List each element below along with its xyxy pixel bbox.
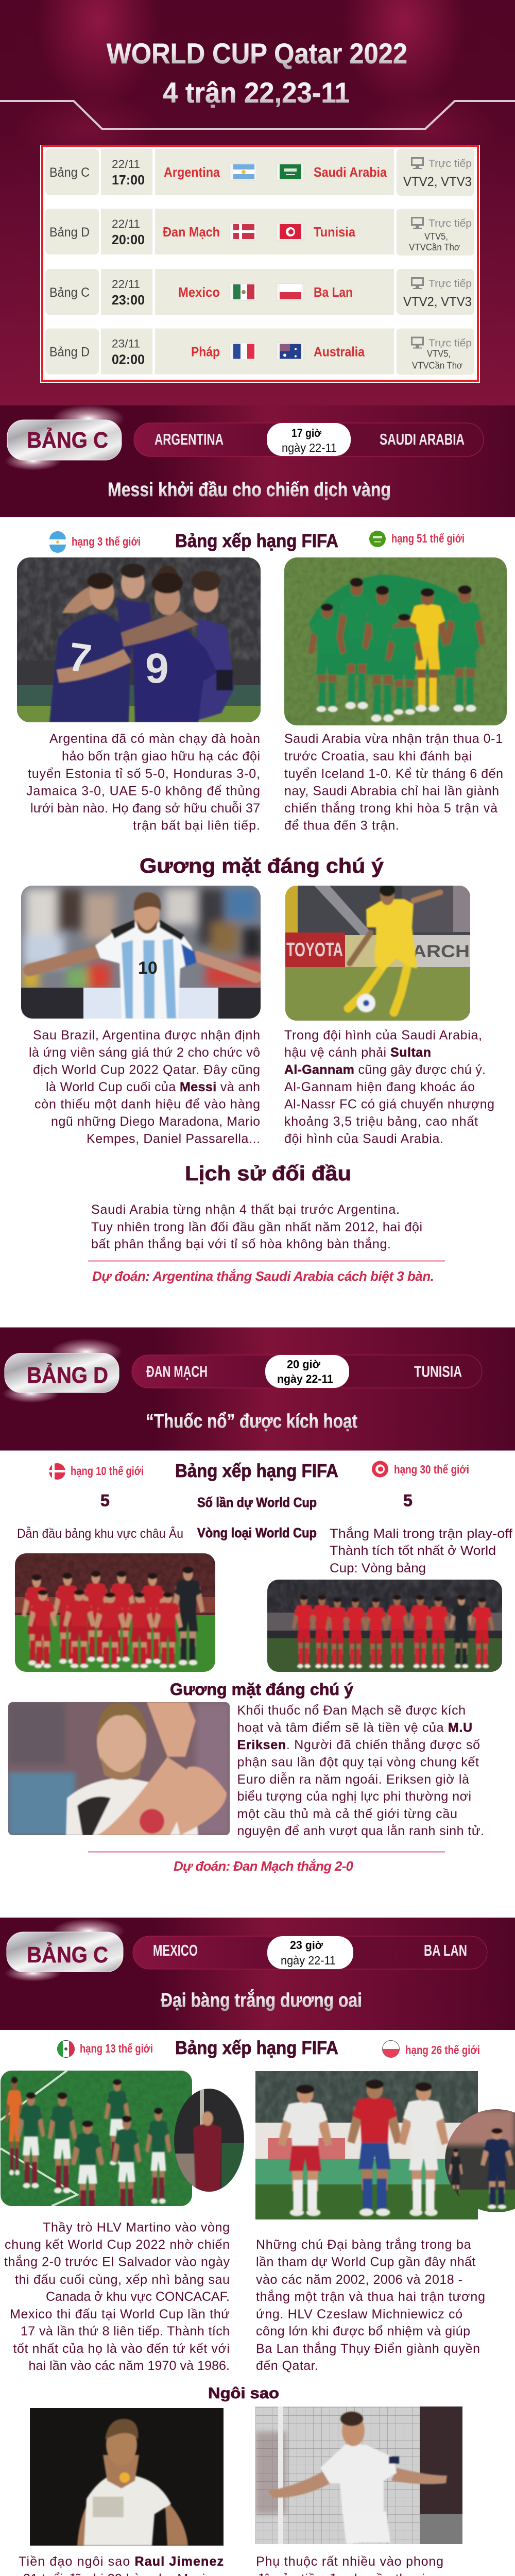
row: Argentina vs Saudi Arabia: Bảng C: [49, 165, 90, 180]
row: Đan Mạch vs Tunisia: VTVCần Thơ: [409, 242, 460, 252]
text: Raul Jimenez: Tiền đạo ngôi sao Raul Jimenez: [19, 2554, 224, 2569]
FIFA ranking row: hạng 3 thế giới: [72, 535, 141, 548]
FIFA ranking row: hạng 51 thế giới: [391, 532, 465, 545]
heading: Lịch sử đối đầu: Lịch sử đối đầu: [185, 1162, 351, 1185]
photo: Mexico team: [1, 2071, 192, 2216]
match banner: Bảng D: ĐAN MẠCH: [146, 1362, 208, 1381]
match banner: Bảng D: “Thuốc nổ” được kích hoạt: [146, 1411, 357, 1432]
text: Messi: còn thiếu một danh hiệu để vào hàng: [35, 1097, 260, 1112]
title: 4 trận 22,23-11: [163, 76, 350, 109]
prediction: Argentina: Dự đoán: Argentina thắng Saudi Arabia cách biệt 3 bàn.: [92, 1268, 434, 1284]
text: Ba Lan: vào các năm 2002, 2006 và 2018 -: [256, 2273, 462, 2287]
photo: Al-Gannam: ARCH: [412, 942, 470, 961]
FIFA ranking and World Cup stats: 5: [100, 1491, 110, 1510]
photo: Messi: [21, 886, 263, 1019]
text: Eriksen: một cầu thủ mà cả thế giới từng cầu: [237, 1807, 457, 1821]
match banner: Bảng D: TUNISIA: [414, 1362, 462, 1381]
row: Mexico vs Ba Lan: Mexico: [178, 284, 220, 300]
text: Ba Lan: công lớn khi được bổ nhiệm và giúp: [256, 2324, 470, 2338]
text: Mexico: chung kết World Cup 2022 nhờ chiến: [5, 2238, 230, 2252]
photo: Poland coach: [445, 2109, 515, 2212]
text: Mexico: Canada ở khu vực CONCACAF.: [46, 2290, 230, 2304]
text: Eriksen: hoạt và tâm điểm sẽ là tiền vệ của M.U: [237, 1721, 472, 1735]
photo: Poland team: [255, 2071, 478, 2219]
row: Đan Mạch vs Tunisia: VTV5,: [424, 231, 448, 242]
row: Pháp vs Australia: Trực tiếp: [428, 338, 472, 349]
row: Đan Mạch vs Tunisia: [45, 209, 474, 256]
text: Eriksen: nguyện để anh vượt qua lằn ranh sinh tử.: [237, 1823, 484, 1838]
photo: Argentina team: 7: [66, 634, 94, 682]
text: Argentina form: trận bất bại liên tiếp.: [133, 818, 260, 833]
match banner: Bảng C: BA LAN: [424, 1941, 467, 1959]
row: Mexico vs Ba Lan: Ba Lan: [314, 284, 353, 300]
text: Messi: Kempes, Daniel Passarella...: [87, 1131, 260, 1146]
match banner: Bảng D: ngày 22-11: [277, 1372, 333, 1385]
row: Pháp vs Australia: VTVCần Thơ: [412, 361, 462, 371]
panel: header: [0, 0, 515, 405]
text: Eriksen: Eriksen. Người đã chiến thắng được số: [237, 1737, 480, 1752]
photo: Saudi Arabia team: [284, 557, 507, 725]
text: Argentina form: hảo bốn trận giao hữu hạ các đội: [62, 749, 260, 764]
text: Ba Lan: [256, 2237, 485, 2373]
text: Saudi Arabia form: để thua đến 3 trận.: [284, 818, 399, 833]
photo: Eriksen: [8, 1702, 230, 1835]
title: WORLD CUP Qatar 2022: [107, 37, 407, 70]
text: Saudi Arabia form: [284, 732, 503, 833]
row: Argentina vs Saudi Arabia: 17:00: [112, 172, 145, 188]
prediction: Đan Mạch: Dự đoán: Đan Mạch thắng 2-0: [174, 1858, 354, 1874]
photo: Mexico coach: [174, 2089, 245, 2192]
FIFA ranking and World Cup stats: Cup: Vòng bảng: [330, 1561, 426, 1575]
text: Argentina form: Argentina đã có màn chạy đà hoàn: [49, 732, 260, 746]
row: Mexico vs Ba Lan: 22/11: [112, 278, 140, 291]
row: Pháp vs Australia: Australia: [314, 344, 365, 360]
text: Ba Lan: ứng. HLV Czeslaw Michniewicz có: [256, 2307, 462, 2321]
row: Pháp vs Australia: [45, 329, 474, 375]
text: Argentina form: lưới bàn nào. Họ đang sở hữu chuỗi 37: [30, 801, 260, 816]
FIFA ranking and World Cup stats: Thắng Mali trong trận play-off: [330, 1526, 512, 1541]
match banner: Bảng C: BẢNG C: [27, 427, 108, 453]
text: Al-Gannam: hậu vệ cánh phải Sultan: [284, 1045, 431, 1060]
row: Pháp vs Australia: Pháp: [191, 344, 220, 360]
text: Al-Gannam: đội hình của Saudi Arabia.: [284, 1131, 443, 1146]
text: Al-Gannam: [284, 1028, 494, 1146]
text: Ba Lan: lần tham dự World Cup gần đây nhất: [256, 2255, 476, 2269]
row: Argentina vs Saudi Arabia: Trực tiếp: [428, 158, 472, 170]
match banner: Bảng C: SAUDI ARABIA: [380, 430, 465, 448]
match banner: Bảng D: BẢNG D: [27, 1362, 108, 1388]
match banner: Bảng C: MEXICO: [153, 1941, 198, 1959]
row: Đan Mạch vs Tunisia: Trực tiếp: [428, 218, 472, 229]
match banner: Bảng C: [0, 405, 515, 517]
text: Al-Gannam: Al-Gannam hiện đang khoác áo: [284, 1080, 475, 1094]
text: Eriksen: [237, 1703, 484, 1838]
match banner: Bảng C: ngày 22-11: [281, 1954, 336, 1967]
FIFA ranking row: Bảng xếp hạng FIFA: [175, 2037, 338, 2058]
text: Argentina form: Jamaica 3-0, UAE 5-0 không để thủng: [26, 784, 260, 799]
photo: Al-Gannam: TOYOTA: [286, 939, 343, 961]
row: Pháp vs Australia: Bảng D: [49, 345, 90, 360]
FIFA ranking and World Cup stats: hạng 10 thế giới: [71, 1464, 144, 1478]
text: Saudi Arabia form: chiến thắng trong khi hòa 5 trận và: [284, 801, 497, 816]
text: Ba Lan: đến Qatar.: [256, 2359, 318, 2373]
match banner: Bảng C: Messi khởi đầu cho chiến dịch vàng: [108, 479, 391, 501]
FIFA ranking and World Cup stats: Dẫn đầu bảng khu vực châu Âu: [17, 1526, 183, 1541]
text: Saudi Arabia form: nay, Saudi Abrabia chỉ hai lần giành: [284, 784, 499, 799]
heading: Gương mặt đáng chú ý: Gương mặt đáng chú ý: [140, 855, 384, 877]
FIFA ranking row: [49, 530, 465, 553]
text: Eriksen: Euro diễn ra năm ngoái. Eriksen giờ là: [237, 1772, 469, 1787]
FIFA ranking and World Cup stats: [17, 1460, 512, 1575]
panel: Mexico vs Ba Lan: [0, 1918, 515, 2576]
text: Mexico: hai lần vào các năm 1970 và 1986.: [29, 2359, 230, 2373]
match banner: Bảng D: [0, 1327, 515, 1451]
match banner: Bảng C: ngày 22-11: [282, 441, 337, 454]
photo: Messi: 10: [138, 958, 158, 978]
row: Pháp vs Australia: 23/11: [112, 337, 140, 350]
match banner: Bảng D: 20 giờ: [287, 1358, 320, 1370]
text: Messi: ngũ những Diego Maradona, Mario: [51, 1114, 260, 1129]
text: Eriksen: phận sau lần đột quỵ tại vòng chung kết: [237, 1755, 479, 1769]
text: head to head: Tuy nhiên trong lần đối đầu gần nhất năm 2012, hai đội: [91, 1220, 422, 1234]
text: Ba Lan: Ba Lan thắng Thụy Điển giành quyền: [256, 2341, 480, 2356]
row: Mexico vs Ba Lan: VTV2, VTV3: [403, 295, 472, 309]
row: Argentina vs Saudi Arabia: [45, 149, 474, 196]
photo: Argentina team: [17, 557, 261, 722]
text: Messi: Sau Brazil, Argentina được nhận định: [33, 1028, 260, 1043]
row: Đan Mạch vs Tunisia: Bảng D: [49, 225, 90, 240]
match banner: Bảng C: ARGENTINA: [154, 430, 224, 448]
heading: Ngôi sao: Ngôi sao: [208, 2385, 279, 2402]
FIFA ranking and World Cup stats: Vòng loại World Cup: [197, 1525, 317, 1540]
row: Mexico vs Ba Lan: Bảng C: [49, 285, 90, 300]
text: Argentina form: tuyển Estonia tỉ số 5-0, Honduras 3-0,: [28, 767, 260, 781]
title: [107, 37, 407, 109]
row: Argentina vs Saudi Arabia: 22/11: [112, 158, 140, 171]
text: Eriksen: biểu tượng của nghị lực phi thường nơi: [237, 1789, 471, 1804]
text: Al-Gannam: khoảng 3,5 triệu bảng, cao nhất: [284, 1114, 478, 1129]
row: Argentina vs Saudi Arabia: Argentina: [164, 164, 220, 180]
FIFA ranking row: hạng 26 thế giới: [405, 2043, 480, 2057]
text: Messi: là World Cup cuối của Messi và anh: [46, 1080, 260, 1094]
text: Eriksen: Khối thuốc nổ Đan Mạch sẽ được kích: [237, 1703, 466, 1718]
row: Pháp vs Australia: VTV5,: [427, 348, 451, 359]
text: Ba Lan: thắng một trận và thua hai trận tương: [256, 2289, 485, 2304]
row: Mexico vs Ba Lan: Trực tiếp: [428, 278, 472, 290]
heading: Gương mặt đáng chú ý: Gương mặt đáng chú ý: [170, 1680, 353, 1699]
row: Đan Mạch vs Tunisia: Tunisia: [314, 224, 355, 240]
FIFA ranking and World Cup stats: Bảng xếp hạng FIFA: [175, 1460, 338, 1481]
row: Pháp vs Australia: 02:00: [112, 351, 145, 367]
text: Saudi Arabia form: trước Croatia, sau khi đánh bại: [284, 749, 472, 764]
match banner: Bảng C: 23 giờ: [290, 1939, 323, 1952]
photo: Al-Gannam: [285, 884, 470, 1021]
text: head to head: [91, 1202, 422, 1251]
row: Đan Mạch vs Tunisia: Đan Mạch: [163, 224, 220, 240]
text: Messi: [29, 1028, 260, 1146]
row: Đan Mạch vs Tunisia: 22/11: [112, 217, 140, 230]
row: Mexico vs Ba Lan: 23:00: [112, 292, 145, 308]
row: Argentina vs Saudi Arabia: VTV2, VTV3: [403, 175, 472, 189]
photo: Denmark team: [15, 1553, 215, 1672]
text: Robert Lewandowski: [256, 2554, 460, 2576]
text: head to head: bất phân thắng bại với tỉ số hòa không bàn thắng.: [91, 1236, 391, 1251]
text: Al-Gannam: Al-Nassr FC có giá chuyển nhượng: [284, 1097, 494, 1112]
panel: Đan Mạch vs Tunisia: [0, 1327, 515, 1874]
text: Saudi Arabia form: Saudi Arabia vừa nhận trận thua 0-1: [284, 732, 503, 746]
text: Mexico: [4, 2221, 230, 2373]
FIFA ranking row: hạng 13 thế giới: [80, 2042, 153, 2055]
match banner: Bảng C: Đại bàng trắng dương oai: [161, 1989, 362, 2011]
text: Al-Gannam: Trong đội hình của Saudi Arabia,: [284, 1028, 482, 1043]
photo: Argentina team: 9: [145, 645, 169, 692]
FIFA ranking and World Cup stats: Thành tích tốt nhất ở World: [330, 1544, 496, 1558]
panel: Argentina vs Saudi Arabia: [0, 405, 515, 1284]
FIFA ranking and World Cup stats: 5: [403, 1491, 413, 1510]
text: Mexico: thắng 2-0 trước El Salvador vào ngày: [4, 2255, 230, 2269]
match banner: Bảng C: [0, 1918, 515, 2030]
match banner: Bảng C: 17 giờ: [291, 427, 321, 439]
FIFA ranking and World Cup stats: hạng 30 thế giới: [394, 1463, 469, 1476]
panel: match schedule table: [40, 145, 480, 383]
text: Robert Lewandowski: Phụ thuộc rất nhiều vào phong: [256, 2554, 443, 2569]
row: Argentina vs Saudi Arabia: Saudi Arabia: [314, 164, 387, 180]
text: Mexico: Mexico thi đấu tại World Cup lần thứ: [10, 2307, 230, 2321]
text: Saudi Arabia form: tuyển Iceland 1-0. Kể từ tháng 6 đến: [284, 767, 503, 781]
text: Argentina form: [26, 732, 260, 833]
photo: Robert Lewandowski: [255, 2406, 462, 2544]
text: Raul Jimenez: [19, 2554, 224, 2576]
match banner: Bảng C: BẢNG C: [27, 1942, 108, 1968]
row: Mexico vs Ba Lan: [45, 269, 474, 315]
photo: Tunisia team: [267, 1580, 502, 1672]
FIFA ranking and World Cup stats: Số lần dự World Cup: [197, 1495, 317, 1510]
photo: Raul Jimenez: [30, 2408, 224, 2546]
FIFA ranking row: Bảng xếp hạng FIFA: [175, 530, 338, 551]
FIFA ranking row: [57, 2037, 480, 2058]
text: Ba Lan: Những chú Đại bàng trắng trong ba: [256, 2237, 471, 2252]
text: Messi: là ứng viên sáng giá thứ 2 cho chức vô: [29, 1045, 260, 1060]
text: Mexico: Thầy trò HLV Martino vào vòng: [43, 2221, 230, 2235]
text: head to head: Saudi Arabia từng nhận 4 thất bại trước Argentina.: [91, 1202, 400, 1217]
text: Mexico: tốt nhất của họ là vào đến tứ kết với: [13, 2342, 230, 2356]
text: Al-Gannam: Al-Gannam cũng gây được chú ý.: [284, 1062, 486, 1077]
text: Mexico: thi đấu cuối cùng, xếp nhì bảng sau: [15, 2273, 230, 2287]
text: Mexico: 17 và lần thứ 8 liên tiếp. Thành tích: [21, 2324, 230, 2338]
row: Đan Mạch vs Tunisia: 20:00: [112, 232, 145, 247]
text: Messi: địch World Cup 2022 Qatar. Đây cũng: [33, 1062, 260, 1077]
